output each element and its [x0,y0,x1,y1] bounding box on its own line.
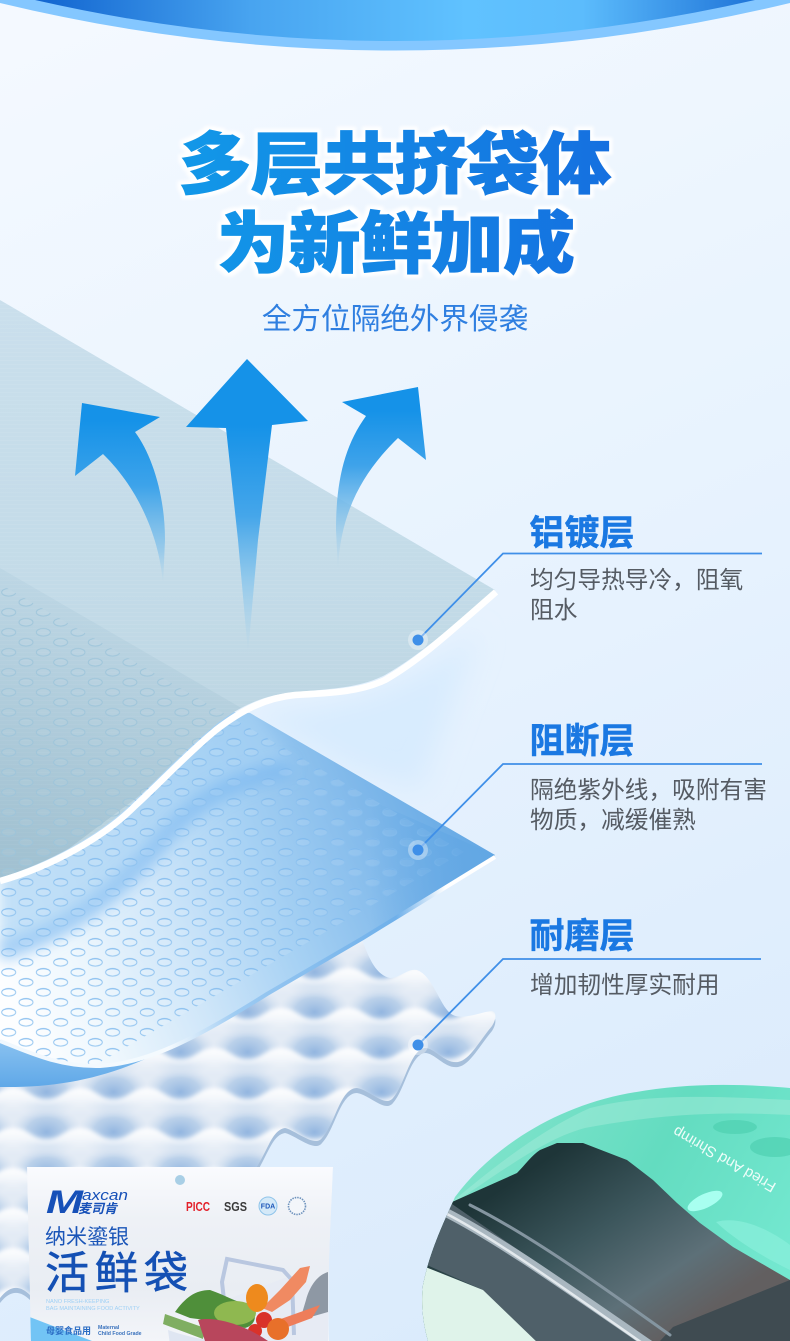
leader line [418,554,762,640]
perforations fading to tip [363,800,495,937]
white film edge [0,592,496,881]
pepper [246,1284,268,1312]
heading: 耐磨层 [530,917,635,956]
English tagline: NANO FRESH-KEEPING [46,1299,109,1305]
description: 阻水 [530,597,578,624]
lower dark panel [660,1280,790,1341]
top banner arc [0,0,790,50]
basket body [246,1320,328,1341]
arrow: left [75,403,165,585]
film surface [0,700,495,1065]
marker dot [408,840,428,860]
upper flap highlight [452,1097,790,1204]
arrow: right [336,387,426,570]
meat [198,1319,268,1341]
product bag: opened pouch [418,1080,790,1341]
grade label English [98,1325,142,1335]
arrows rising [75,359,426,653]
basket bowl [168,1330,205,1341]
pouch outer grey wall [420,1204,650,1341]
heading: 铝镀层 [530,514,635,553]
foam underside edge [0,945,495,1303]
pale reflection [716,1220,790,1270]
green leaves bright [214,1301,256,1325]
orange [267,1318,289,1340]
pale mint lower panel [418,1264,540,1341]
aluminised surface [0,300,495,878]
see-through shading [0,576,240,878]
corner band [27,1316,92,1341]
English tagline [46,1299,140,1310]
callout: blocking layer [408,722,767,860]
description: 增加韧性厚实耐用 [530,972,720,999]
marker dot [408,1035,428,1055]
salmon [262,1266,310,1312]
soft glow under top layer [245,630,480,790]
product name small: 纳米鎏银 [45,1226,129,1249]
pouch interior [420,1143,790,1341]
darker mint patches [713,1120,790,1157]
basket frame [222,1259,294,1335]
title [179,127,611,281]
printed pouch text: Fried And Shrimp [670,1123,779,1195]
blue wave reflection [0,768,290,953]
FDA badge [259,1197,277,1215]
description: 均匀导热导冷，阻氧 [530,567,743,594]
foam surface [0,940,495,1298]
zip seal highlights [445,1205,670,1341]
film lower edge [0,857,495,1066]
leader line [418,764,762,850]
PICC mark: PICC [186,1199,210,1214]
bright reflection [688,1190,722,1212]
blue band under film [0,1012,235,1087]
hang hole [175,1175,185,1185]
product name large: 活鲜袋 [45,1249,188,1298]
grade label English: Maternal [98,1325,120,1331]
marker dot [408,630,428,650]
title: 为新鲜加成 [217,206,575,281]
layer: blocking film [0,712,496,1087]
greens [175,1290,255,1328]
leader line [418,959,761,1045]
layer: aluminised film [0,300,496,900]
perforations seen through film [1,588,224,876]
FDA badge: FDA [261,1204,275,1210]
pouch mint face [420,1080,790,1341]
heading: 阻断层 [530,722,635,761]
light blue area above wave [0,705,295,953]
grade label English: Child Food Grade [98,1331,142,1337]
product bag: front [27,1167,333,1341]
description: 物质，减缓催熟 [530,807,696,834]
brushed texture [0,300,495,880]
brand logo [46,1190,128,1214]
callout: wear-resistant layer [408,917,761,1055]
subtitle: 全方位隔绝外界侵袭 [262,303,528,336]
film perforations [1,720,457,1064]
arrow: centre [186,359,308,653]
tomatoes [248,1312,272,1338]
seal badge [288,1198,306,1214]
brand logo: axcan [82,1188,128,1204]
salmon lower [282,1305,320,1327]
fish [302,1272,328,1316]
SGS mark: SGS [224,1199,247,1214]
brand logo: 麦司肯 [78,1201,119,1216]
cucumbers [163,1314,205,1339]
callout: aluminised layer [408,514,762,650]
English tagline: BAG MAINTAINING FOOD ACTIVITY [46,1306,140,1312]
description: 隔绝紫外线，吸附有害 [530,777,767,804]
title: 多层共挤袋体 [179,127,611,202]
brand logo: M [46,1184,85,1220]
grade label: 母婴食品用 [46,1325,91,1336]
layer: wear-resistant foam [0,940,495,1303]
